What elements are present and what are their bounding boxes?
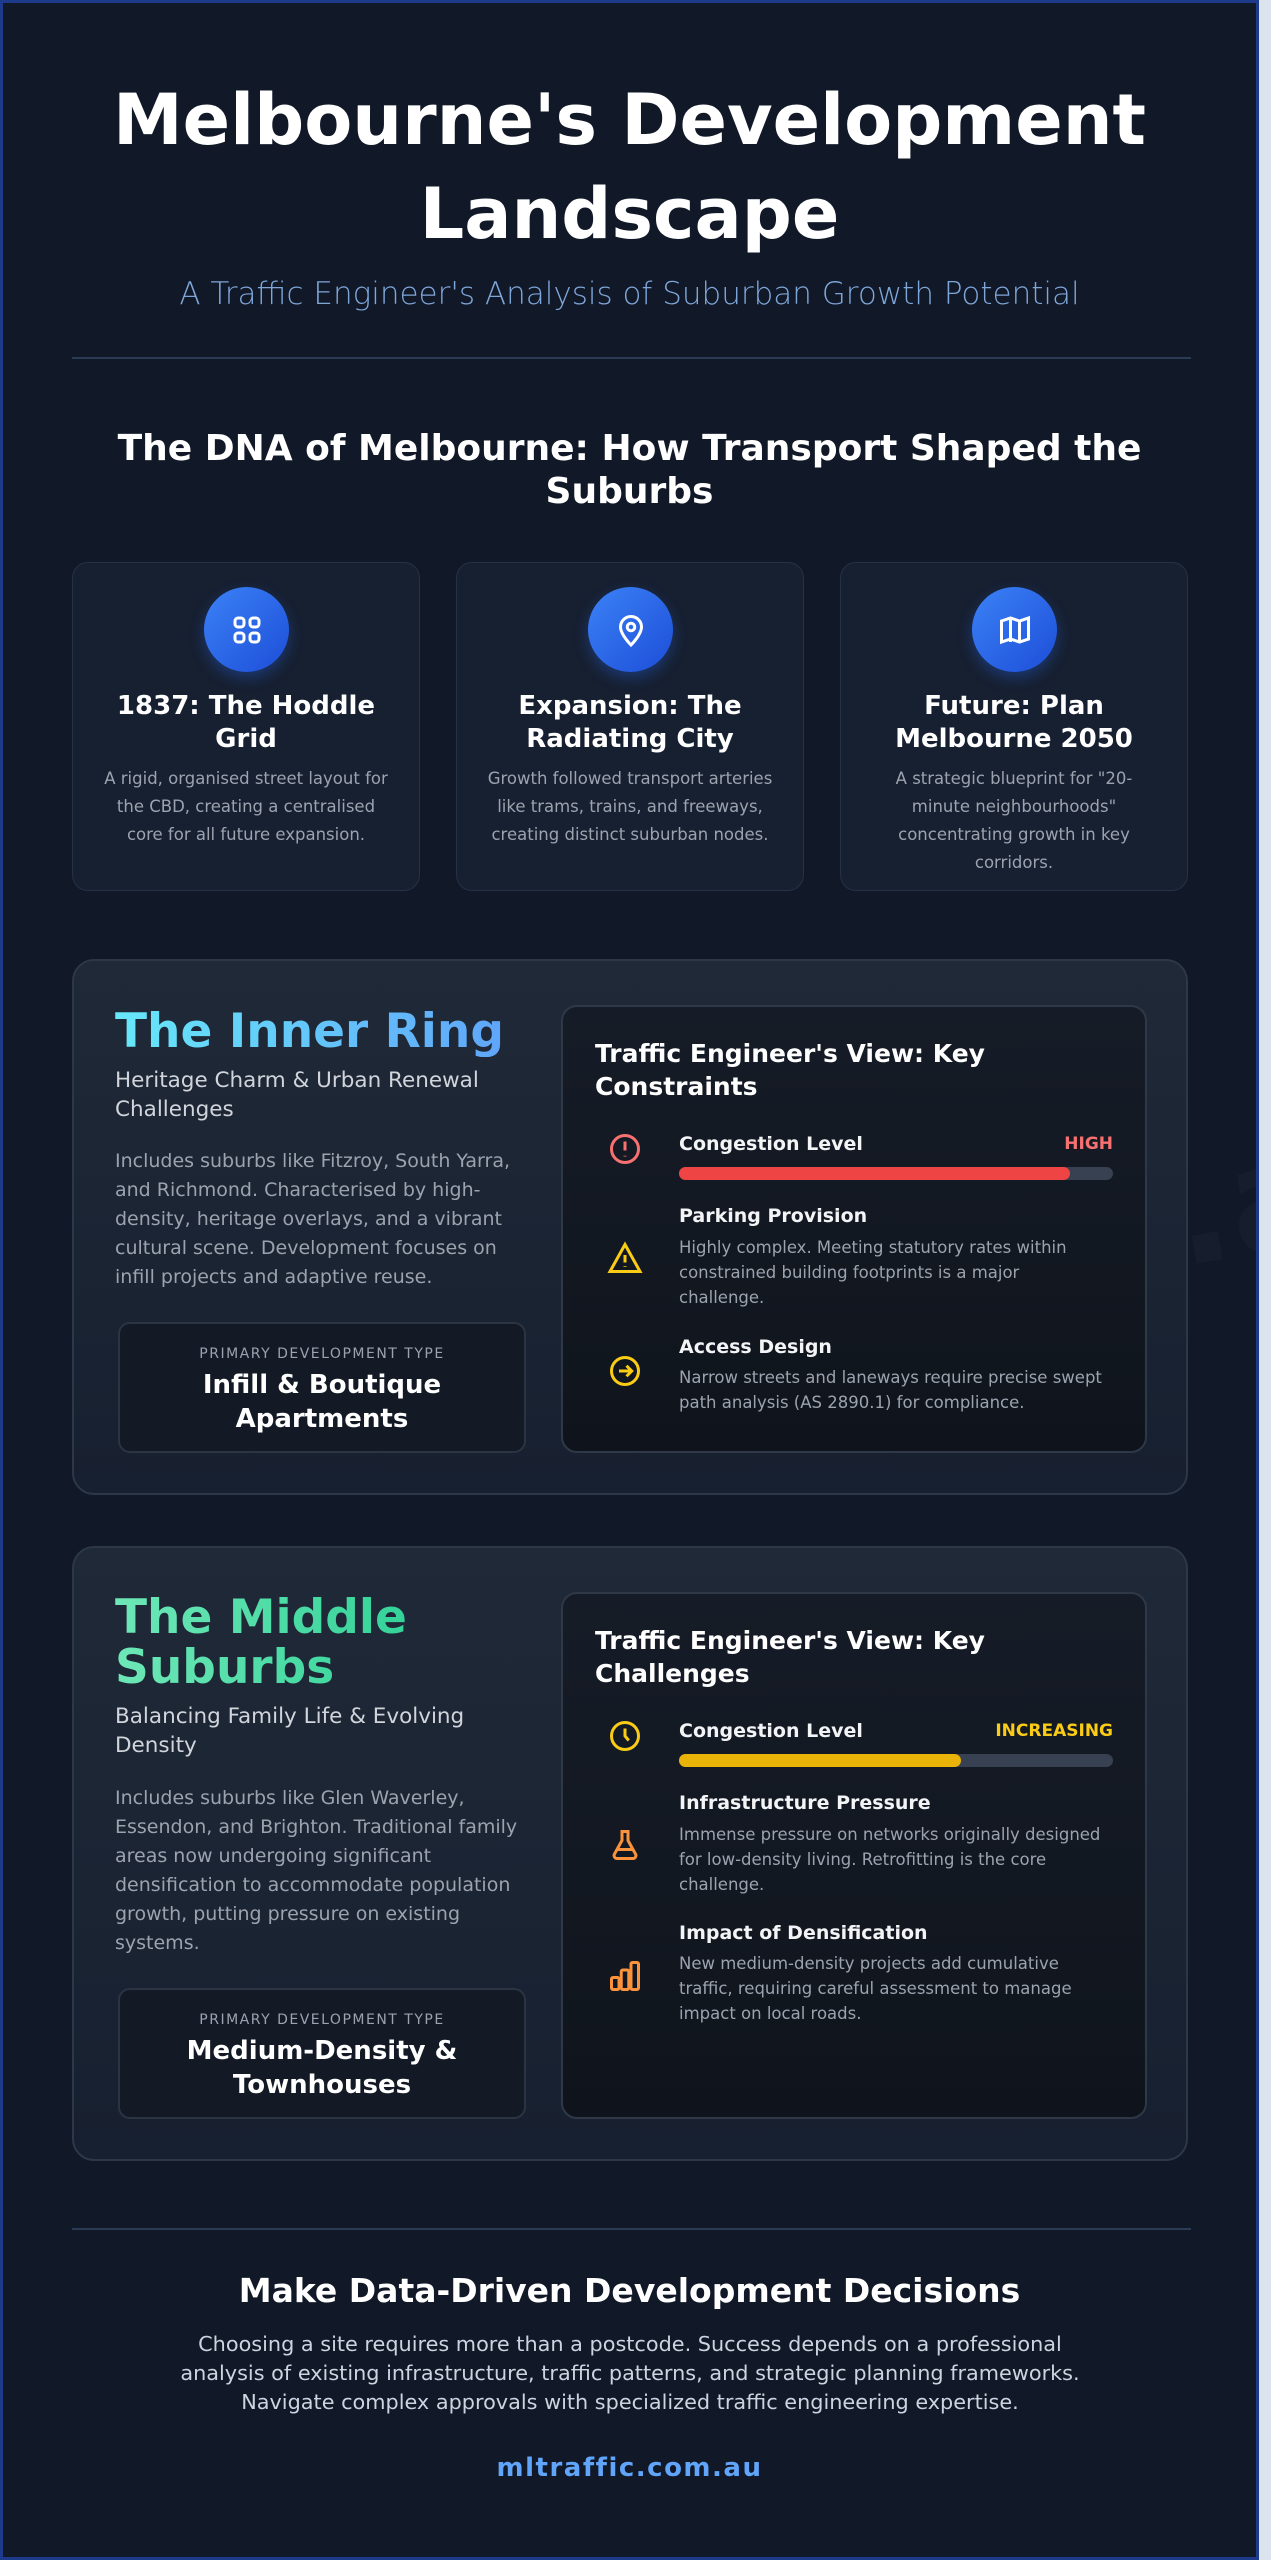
access text: Narrow streets and laneways require precise swept path analysis (AS 2890.1) for compliance.: [679, 1368, 1102, 1412]
card text: A rigid, organised street layout for the CBD, creating a centralised core for all future expansion.: [104, 769, 388, 844]
congestion value: INCREASING: [995, 1721, 1113, 1741]
inner ring description: Includes suburbs like Fitzroy, South Yarra, and Richmond. Characterised by high-density, heritage overlays, and a vibrant cultural scene. Development focuses on infill projects and adaptive reuse.: [115, 1150, 510, 1288]
constraints heading: [595, 1039, 985, 1101]
website link: mltraffic.com.au: [497, 2453, 762, 2483]
icon: alert: [610, 1134, 640, 1164]
middle title: Suburbs: [115, 1640, 334, 1695]
icon: flask: [612, 1830, 638, 1860]
card title: [117, 691, 375, 754]
inner ring subtitle: Heritage Charm & Urban Renewal Challenges: [115, 1068, 479, 1122]
title: [113, 79, 1146, 255]
card: Hoddle Grid: [72, 562, 420, 891]
constraints box: [561, 1005, 1147, 1453]
section heading: DNA: The DNA of Melbourne: How Transport Shaped the Suburbs: [118, 428, 1141, 512]
parking text: Highly complex. Meeting statutory rates within constrained building footprints is a major challenge.: [679, 1238, 1067, 1307]
congestion label: Congestion Level: [679, 1133, 863, 1155]
primary type box: PRIMARY DEVELOPMENT TYPE: [199, 1346, 445, 1362]
middle description: Includes suburbs like Glen Waverley, Essendon, and Brighton. Traditional family areas now undergoing significant densification to accommodate population growth, putting pressure on existing systems.: [115, 1787, 517, 1954]
icon: arrow: [610, 1356, 640, 1386]
access label: Access Design: [679, 1336, 832, 1358]
card: Plan Melbourne: [840, 562, 1188, 891]
CTA text: Choosing a site requires more than a postcode. Success depends on a professional analysis of existing infrastructure, traffic patterns, and strategic planning frameworks. Navigate complex approvals with specialized traffic engineering expertise.: [180, 2332, 1080, 2414]
card title: 1837: The Hoddle: [117, 691, 375, 721]
primary type box: Townhouses: [233, 2070, 411, 2100]
primary type box: [118, 1988, 526, 2119]
congestion value: HIGH: [1064, 1134, 1113, 1154]
panel: middle suburbs: [72, 1546, 1188, 2161]
card title: Grid: [215, 724, 277, 754]
challenges heading: Traffic Engineer's View: Key: [595, 1626, 985, 1655]
middle title: [115, 1593, 407, 1693]
card title: Radiating City: [526, 724, 734, 754]
infrastructure label: Infrastructure Pressure: [679, 1792, 931, 1814]
card title: [895, 691, 1133, 754]
inner ring title: The Inner Ring: [115, 1004, 504, 1059]
middle title: The Middle: [115, 1590, 407, 1645]
icon: warning: [608, 1242, 642, 1273]
challenges heading: Challenges: [595, 1659, 750, 1688]
icon: bar chart: [610, 1961, 640, 1991]
CTA heading: Make Data-Driven Development Decisions: [239, 2271, 1020, 2310]
primary type box: Medium-Density &: [187, 2036, 457, 2066]
primary type box: PRIMARY DEVELOPMENT TYPE: [199, 2012, 445, 2028]
congestion bar: [679, 1754, 1113, 1767]
card title: Expansion: The: [518, 691, 742, 721]
primary type box: [118, 1322, 526, 1453]
title: Melbourne's Development: [113, 79, 1146, 161]
icon: grid: [204, 587, 289, 672]
densification text: New medium-density projects add cumulative traffic, requiring careful assessment to manage impact on local roads.: [679, 1954, 1072, 2023]
densification label: Impact of Densification: [679, 1922, 928, 1944]
challenges box: [561, 1592, 1147, 2119]
congestion label: Congestion Level: [679, 1720, 863, 1742]
infrastructure text: Immense pressure on networks originally designed for low-density living. Retrofitting is the core challenge.: [679, 1825, 1100, 1894]
primary type box: Apartments: [236, 1404, 408, 1434]
icon: clock: [610, 1721, 640, 1751]
subtitle: A Traffic Engineer's Analysis of Suburban Growth Potential: [179, 276, 1080, 312]
constraints heading: Traffic Engineer's View: Key: [595, 1039, 985, 1068]
middle subtitle: Balancing Family Life & Evolving Density: [115, 1704, 464, 1758]
card title: Future: Plan: [924, 691, 1104, 721]
card title: Melbourne 2050: [895, 724, 1133, 754]
challenges heading: [595, 1626, 985, 1688]
parking label: Parking Provision: [679, 1205, 867, 1227]
title: Landscape: [420, 173, 839, 255]
card text: Growth followed transport arteries like trams, trains, and freeways, creating distinct suburban nodes.: [488, 769, 772, 844]
card: Radiating City: [456, 562, 804, 891]
primary type box: Infill & Boutique: [203, 1370, 441, 1400]
panel: inner ring: [72, 959, 1188, 1495]
card title: [518, 691, 742, 754]
constraints heading: Constraints: [595, 1072, 758, 1101]
icon: map: [972, 587, 1057, 672]
icon: pin: [588, 587, 673, 672]
congestion bar: [679, 1167, 1113, 1180]
card text: A strategic blueprint for "20-minute neighbourhoods" concentrating growth in key corridors.: [896, 769, 1132, 872]
